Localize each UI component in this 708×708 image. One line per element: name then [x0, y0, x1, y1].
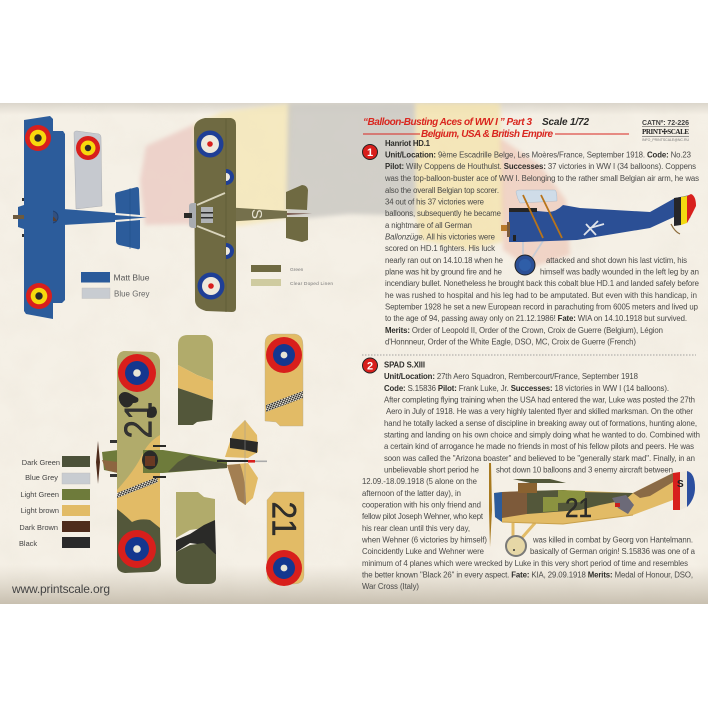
lower wing	[53, 131, 65, 303]
Hanriot text block: attacked and shot down his last victim, his	[546, 256, 687, 265]
Hanriot text block: also the overall Belgian top scorer.	[385, 186, 499, 195]
plane: Hanriot HD.1 side view	[501, 190, 696, 275]
S code letter: S	[248, 209, 265, 219]
wing panel: lower wing, upper half	[178, 335, 213, 425]
Hanriot text block: to the age of 94, passing away only on 21.12.1986! Fate: WIA on 14.10.1918 but survived.	[385, 314, 687, 323]
SPAD text block: basically of German origin! S.15836 was one of a	[530, 547, 696, 556]
upper wing camouflage	[117, 351, 160, 530]
panel: Hanriot HD.1 text	[362, 139, 699, 346]
upper wing	[516, 190, 557, 203]
heading: title: “Balloon-Busting Aces of WW I ” Part 3	[363, 117, 532, 128]
SPAD text block: afternoon of the latter day), in	[362, 489, 461, 498]
legend: SPAD colours: Light brown	[21, 506, 59, 515]
Hanriot text block: himself was badly wounded in the left leg by an	[540, 268, 699, 276]
Hanriot text block: was the top-balloon-buster ace of WW I. Belonging to the rather small Belgian air arm, he was	[384, 174, 699, 183]
SPAD text block: starting and landing on his own choice and simply doing what he wanted to do. Combined with	[384, 430, 700, 440]
badge 2: 2	[367, 360, 373, 372]
engine panel and struts	[197, 193, 225, 237]
rudder: S	[677, 479, 684, 490]
logo: catalog number and brand: INFO_PRINTSCALE@NC.RU	[642, 138, 689, 142]
Hanriot text block: Merits: Order of Leopold II, Order of the Crown, Croix de Guerre (Belgium), Légion	[385, 326, 663, 335]
fuselage	[509, 195, 695, 242]
SPAD text block: shot down 10 balloons and 3 enemy aircraft between	[496, 466, 673, 474]
nose and propeller	[96, 440, 118, 484]
Hanriot text block: scored on HD.1 fighters. His luck	[385, 244, 495, 253]
tailplane	[115, 187, 140, 249]
logo: catalog number and brand	[642, 120, 689, 142]
landing gear and wheel	[506, 523, 535, 556]
Hanriot text block: Unit/Location: 9ème Escadrille Belge, Les Moères/France, September 1918. Code: No.23	[385, 150, 691, 160]
divider: dashed line	[362, 354, 696, 356]
upper wing	[24, 116, 53, 319]
wing panel: right upper, roundel and checker	[265, 334, 303, 426]
Hanriot text block: September 1928 he set a new European record in parachuting from 6005 meters and lived up	[385, 302, 699, 312]
Hanriot text block: 34 out of his 37 victories were	[385, 198, 484, 206]
SPAD text block: when Wehner (6 victories by himself)	[361, 536, 487, 544]
upper wing	[194, 118, 236, 312]
code number 21: 21	[565, 493, 592, 523]
faded flag background	[140, 103, 570, 268]
legend: Clear Doped Linen: Clear Doped Linen	[290, 281, 333, 287]
SPAD text block: SPAD S.XIII	[384, 360, 425, 370]
legend: SPAD colours: Light Green	[20, 490, 59, 499]
Hanriot text block: plane was hit by ground fire and he	[385, 268, 502, 276]
legend: Clear Doped Linen	[251, 279, 333, 287]
SPAD text block: was killed in combat by Georg von Hantelmann.	[532, 536, 693, 544]
SPAD text block: a certain kind of arrogance he made no friends in most of his fellow pilots and peers. He was	[384, 442, 694, 451]
wing panel: right lower, code and roundel: 21	[264, 502, 302, 536]
SPAD text block: minimum of 4 planes which were wrecked by Luke in this very short period of time and resembles	[362, 559, 688, 568]
SPAD text block: unbelievable short period he	[384, 466, 479, 474]
Belgian roundels	[25, 125, 52, 309]
legend: Blue Grey	[82, 288, 150, 298]
legend: SPAD colours: Black	[19, 539, 37, 548]
SPAD text block: soon was called the "Arizona boaster" and believed to be "generally stark mad". Finally, in an	[384, 454, 695, 463]
fuselage	[223, 207, 287, 222]
SPAD text block: 12.09.-18.09.1918 (5 alone on the	[362, 477, 477, 486]
comet insignia	[584, 221, 604, 235]
Hanriot text block: Hanriot HD.1	[385, 139, 431, 148]
legend: SPAD colours: Dark Green	[22, 458, 60, 467]
SPAD text block: hand he totally lacked a sense of discipline in breaking away out of formations, hunting alone,	[384, 419, 697, 428]
tail	[286, 185, 308, 242]
Hanriot text block: Pilot: Willy Coppens de Houthulst. Successes: 37 victories in WW I (34 balloons). Coppens	[385, 162, 696, 171]
logo: catalog number and brand: CATNº: 72-226	[642, 120, 689, 127]
Hanriot text block: a nightmare of all German	[385, 221, 472, 230]
wheel	[515, 255, 535, 275]
SPAD text block: cooperation with his only friend and	[362, 500, 481, 510]
cabane and upper wing	[513, 479, 566, 483]
code number 21 on wing: 21	[118, 402, 160, 438]
SPAD text block: Coincidently Luke and Wehner were	[362, 547, 484, 556]
fuselage	[143, 450, 227, 473]
SPAD text block: the better known "Black 26" in every aspect. Fate: KIA, 29.09.1918 Merits: Medal of Honour, DSO,	[362, 570, 693, 580]
wing struts	[523, 195, 562, 238]
plane: SPAD S.XIII top view	[96, 351, 267, 573]
legend: Matt Blue: Matt Blue	[114, 272, 150, 282]
legend: Green: Green	[290, 267, 304, 273]
heading: title	[363, 117, 629, 140]
hat in ring insignia	[612, 495, 634, 514]
SPAD text block: his rear clean until this very day,	[362, 524, 470, 533]
legend: SPAD colours: Blue Grey	[25, 473, 58, 482]
legend: SPAD colours	[19, 456, 90, 548]
cockpit black edge	[509, 208, 537, 212]
tailplane	[217, 420, 267, 505]
Hanriot text block: d'Honnneur, Order of the White Eagle, DSO, MC, Croix de Guerre (French)	[385, 338, 636, 346]
Hanriot text block: he was rushed to hospital and his leg had to be amputated. But even with this handicap, in	[385, 291, 697, 300]
SPAD text block: Aero in July of 1918. He was a very highly talented flyer and skilled marksman. On the other	[386, 407, 693, 416]
wheel strut	[523, 241, 543, 258]
SPAD text block: Unit/Location: 27th Aero Squadron, Rembercourt/France, September 1918	[384, 372, 638, 381]
Hanriot text block	[384, 139, 699, 346]
cowling	[189, 203, 196, 228]
fuselage and engine	[13, 198, 147, 237]
badge 1	[362, 144, 378, 160]
rudder	[673, 471, 695, 510]
SPAD text block: fellow pilot Joseph Wehner, who kept	[362, 512, 484, 521]
plane: Hanriot HD.1 top view	[13, 116, 147, 319]
wing panel: lower wing, lower half	[176, 492, 216, 584]
logo: catalog number and brand: PRINT✣SCALE	[642, 128, 689, 136]
propeller	[489, 463, 492, 547]
legend: Green	[251, 265, 304, 273]
SPAD text block: War Cross (Italy)	[362, 582, 419, 591]
fuselage	[494, 473, 673, 524]
panel: aged paper background	[0, 103, 708, 604]
plane: SPAD S.XIII side view	[489, 463, 695, 556]
Hanriot text block: nearly ran out on 14.10.18 when he	[385, 256, 503, 265]
heading: title: Scale 1/72	[542, 117, 589, 128]
tail skid	[671, 224, 680, 234]
wing panel: right lower, code and roundel	[264, 492, 304, 586]
lower trim	[502, 515, 633, 524]
badge 2	[362, 358, 378, 373]
Hanriot text block: incendiary bullet. Nonetheless he brought back this cobalt blue HD.1 and landed safely before	[385, 279, 699, 288]
legend: SPAD colours: Dark Brown	[19, 523, 58, 532]
SPAD text block: Code: S.15836 Pilot: Frank Luke, Jr. Successes: 18 victories in WW I (14 balloons).	[384, 384, 669, 393]
heading: title: Belgium, USA & British Empire	[421, 129, 553, 140]
Hanriot text block: Ballonzüge. All his victories were	[385, 232, 495, 242]
wing underside panel: Blue Grey	[74, 131, 102, 209]
website URL: www.printscale.org	[11, 582, 110, 596]
legend: Blue Grey: Blue Grey	[114, 288, 150, 298]
plane: S.E.5 top view, olive green	[184, 118, 312, 312]
American roundels	[118, 354, 156, 568]
rudder stripes	[674, 194, 696, 226]
RAF roundels	[196, 130, 234, 300]
panel: SPAD S.XIII text	[361, 358, 700, 591]
legend: Matt Blue	[81, 272, 150, 282]
Hanriot text block: balloons, subsequently he became	[385, 209, 501, 218]
SPAD text block	[361, 360, 700, 591]
SPAD text block: After completing flying training when the USA had entered the war, Luke was posted the 27th	[384, 396, 695, 404]
badge 1: 1	[367, 147, 373, 159]
